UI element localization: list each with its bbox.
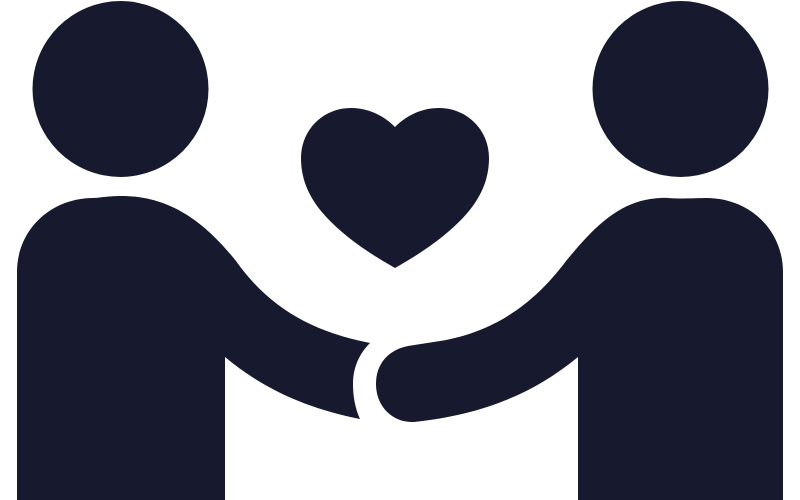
icon: left person head — [32, 1, 208, 177]
icon: right person head — [592, 1, 768, 177]
icon: left person body and arm — [17, 196, 370, 500]
icon: right person body and arm — [376, 198, 783, 500]
icon: heart — [301, 108, 489, 268]
